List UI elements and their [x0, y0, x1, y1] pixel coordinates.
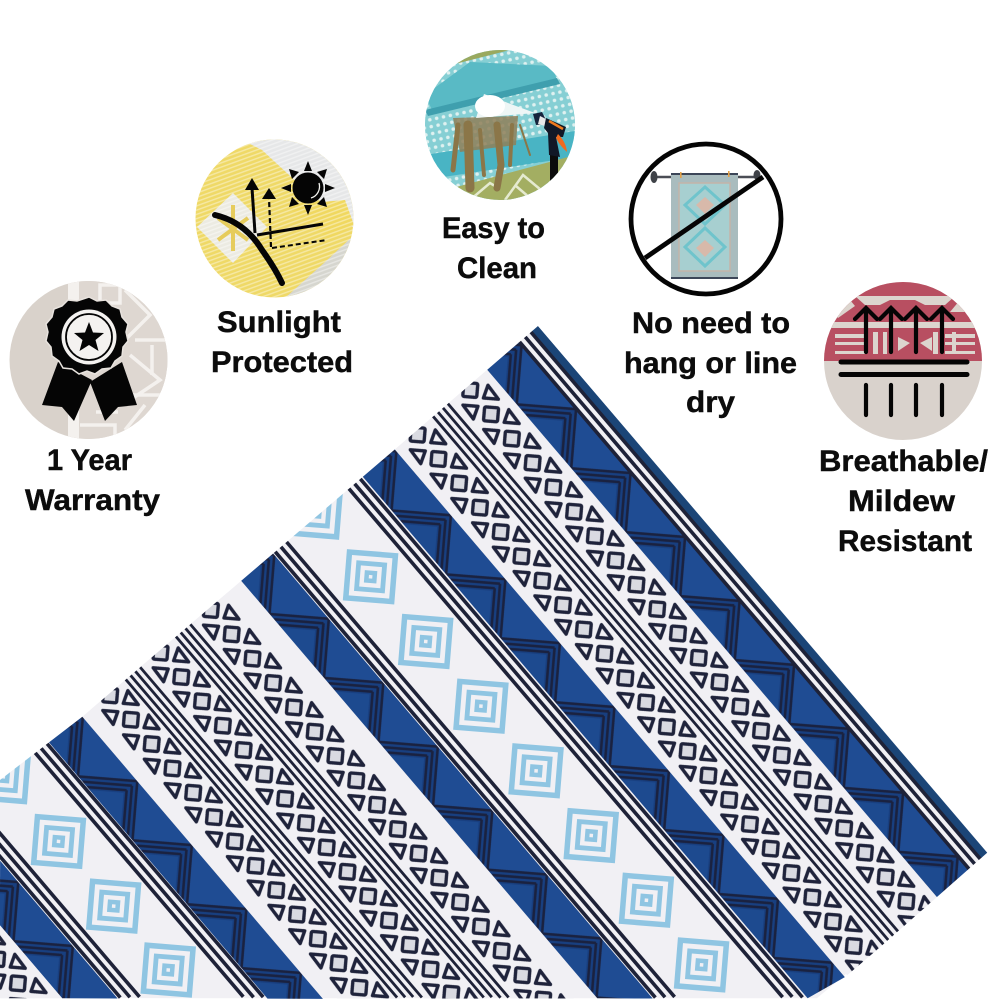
fabric layers [841, 360, 967, 364]
diamond band 1 [442, 363, 936, 931]
diamond band 3 [202, 602, 566, 998]
label: 1 Year Warranty [25, 444, 160, 517]
blue chevron stripe 1 [480, 335, 970, 898]
label: Sunlight Protected [211, 306, 353, 379]
label: No need to hang or line dry: No need to [632, 307, 790, 340]
lower bars [866, 385, 942, 415]
label: Easy to Clean [442, 212, 545, 285]
rosette [46, 297, 128, 374]
label: No need to hang or line dry: hang or line [624, 347, 797, 380]
diamond band 2 [390, 408, 884, 975]
rug photograph [0, 300, 989, 1000]
blue chevron stripe 4 [42, 707, 323, 1000]
label: Breathable/ Mildew Resistant: Breathable/ [819, 445, 989, 478]
upward arrows [855, 308, 953, 352]
label: Easy to Clean: Easy to [442, 212, 545, 245]
ribbon tails [42, 362, 92, 421]
label: Easy to Clean: Clean [457, 252, 537, 285]
hose nozzle [533, 112, 548, 125]
blue chevron stripe 3 [233, 544, 653, 1000]
woven dark line groups [0, 323, 983, 1000]
label: Sunlight Protected: Protected [211, 346, 353, 379]
icon: warranty ribbon badge [10, 281, 169, 439]
icon: breathable mildew resistant [824, 282, 982, 440]
icon: easy to clean hose [425, 50, 575, 200]
icon: sunlight protected [195, 139, 354, 298]
dashed arrow [269, 198, 271, 247]
solid arrow [252, 188, 255, 233]
sun [292, 172, 324, 204]
mini rug [671, 174, 738, 279]
label: No need to hang or line dry: dry [686, 386, 735, 419]
blue chevron stripe 2 [355, 441, 845, 1000]
diamond band 4 [151, 644, 479, 999]
label: 1 Year Warranty: Warranty [25, 484, 160, 517]
label: No need to hang or line dry [624, 307, 797, 419]
diamond band 5 [100, 687, 390, 999]
label: Breathable/ Mildew Resistant: Mildew [848, 485, 956, 518]
label: 1 Year Warranty: 1 Year [47, 444, 132, 477]
label: Breathable/ Mildew Resistant [819, 445, 989, 558]
navy border [525, 318, 989, 860]
icon: no need to hang [631, 144, 781, 294]
label: Sunlight Protected: Sunlight [217, 306, 341, 339]
diamond band 6 [0, 925, 62, 1000]
hanging rod [653, 176, 760, 178]
leaf section curve [215, 215, 282, 283]
blue chevron stripe 5 [0, 861, 118, 1000]
star [74, 322, 104, 351]
label: Breathable/ Mildew Resistant: Resistant [838, 525, 972, 558]
light blue diamonds stripe 1 [294, 494, 730, 993]
light blue diamonds stripe 2 [0, 756, 196, 998]
prohibition ring [631, 144, 781, 294]
